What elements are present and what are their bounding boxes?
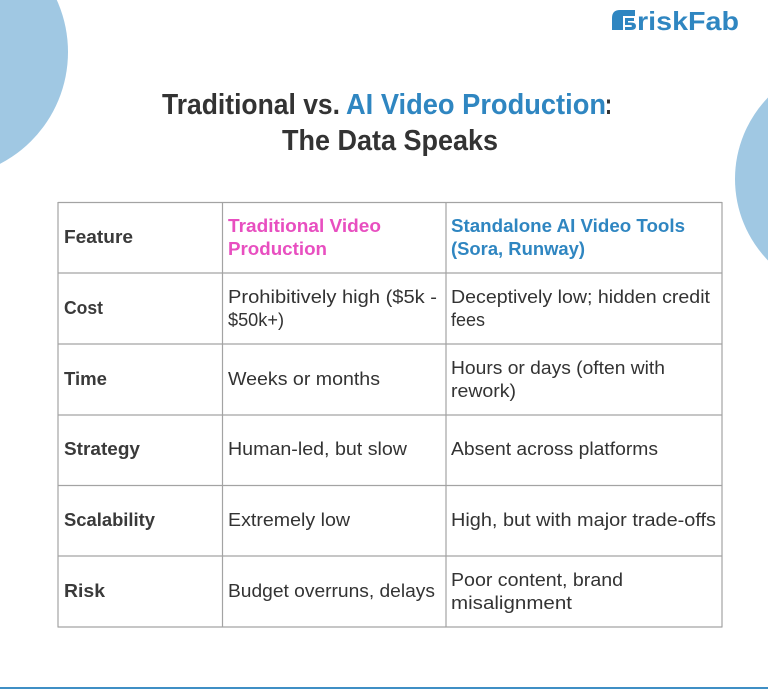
decorative circle: right — [735, 62, 768, 296]
row: header: (Sora, Runway) — [451, 238, 585, 259]
title line 1 — [162, 89, 612, 121]
row: scalability: High, but with major trade-offs — [451, 509, 716, 530]
row: scalability — [64, 509, 716, 530]
title — [162, 89, 612, 157]
title line 1: AI Video Production — [346, 89, 606, 121]
row: risk — [64, 569, 623, 613]
logo wordmark: riskFab — [637, 6, 739, 36]
row: strategy: Absent across platforms — [451, 438, 658, 459]
decorative circle: top left — [0, 0, 68, 178]
row: strategy: Strategy — [64, 438, 141, 459]
logo: BriskFab — [612, 6, 739, 36]
title line 1: : — [605, 89, 612, 121]
icon: logo B mark — [612, 10, 636, 30]
title line 2: The Data Speaks — [282, 125, 498, 157]
row: cost: Prohibitively high ($5k - — [228, 286, 437, 307]
row: cost: Cost — [64, 297, 103, 318]
row: time: Weeks or months — [228, 368, 380, 389]
row: risk: Risk — [64, 580, 106, 601]
row: strategy: Human-led, but slow — [228, 438, 408, 459]
row: time: rework) — [451, 380, 516, 401]
row: scalability: Scalability — [64, 509, 156, 530]
row: header: Production — [228, 238, 327, 259]
row: time: Hours or days (often with — [451, 357, 665, 378]
bottom rule — [0, 687, 768, 689]
row: strategy — [64, 438, 658, 459]
comparison table — [58, 202, 722, 628]
row: cost: $50k+) — [228, 309, 284, 330]
row: risk: Poor content, brand — [451, 569, 623, 590]
row: time — [64, 357, 665, 401]
row: header: Standalone AI Video Tools — [451, 215, 685, 236]
row: cost — [64, 286, 710, 330]
row: scalability: Extremely low — [228, 509, 351, 530]
row: header — [64, 215, 685, 259]
row: risk: Budget overruns, delays — [228, 580, 435, 601]
row: risk: misalignment — [451, 592, 572, 613]
row: time: Time — [64, 368, 107, 389]
title line 1: Traditional vs. — [162, 89, 340, 121]
row: cost: Deceptively low; hidden credit — [451, 286, 710, 307]
table grid — [58, 202, 722, 628]
row: header: Feature — [64, 226, 133, 247]
row: cost: fees — [451, 309, 485, 330]
row: header: Traditional Video — [228, 215, 381, 236]
